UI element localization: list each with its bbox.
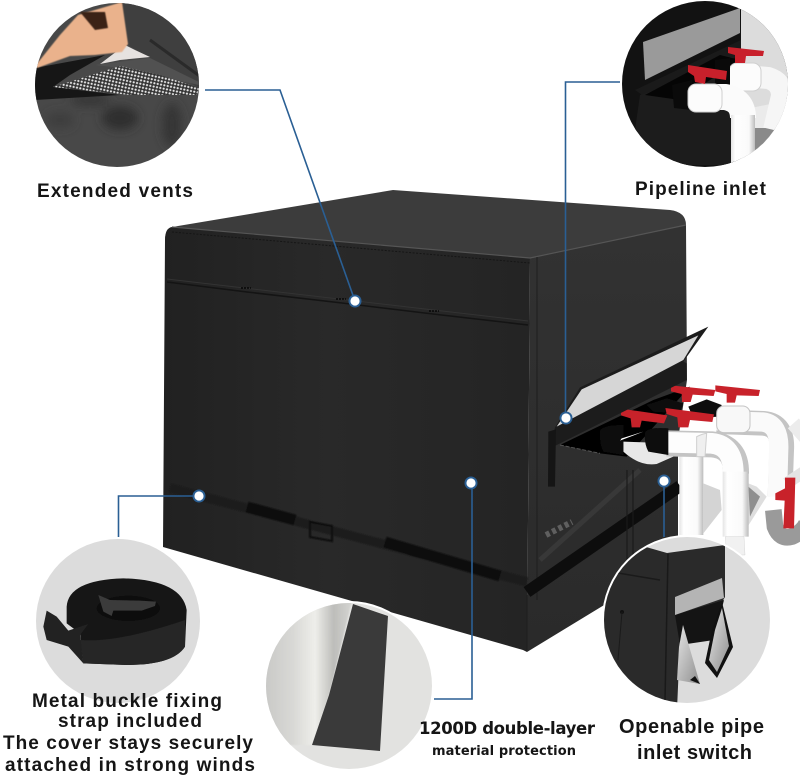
flap: pipeline inlet cover bbox=[548, 327, 708, 487]
cover top face bbox=[165, 190, 686, 258]
side strap bbox=[527, 486, 680, 592]
drain pipe bbox=[773, 510, 800, 537]
label: strap: strap included bbox=[58, 711, 202, 732]
black valve couplings bbox=[600, 425, 668, 455]
mini cover bbox=[604, 545, 725, 702]
label: 1200D: 1200D double-layer bbox=[419, 719, 596, 738]
label: openable bbox=[619, 716, 764, 764]
label: 1200D bbox=[419, 719, 596, 759]
red valve handles bbox=[621, 385, 795, 528]
rear fitting bbox=[729, 63, 761, 91]
label: strap bbox=[3, 691, 255, 776]
leader: material bbox=[434, 483, 472, 699]
marker dot: switch bbox=[658, 474, 670, 488]
vent seam bbox=[167, 282, 528, 325]
product: black cover bbox=[163, 190, 687, 652]
silver patch bbox=[675, 578, 724, 615]
label: pipeline inlet: Pipeline inlet bbox=[635, 179, 767, 200]
opening bbox=[675, 600, 724, 645]
label: openable: Openable pipe bbox=[619, 716, 764, 738]
front coupling bbox=[673, 95, 690, 110]
red handles bbox=[688, 47, 764, 84]
rear fitting bbox=[717, 406, 750, 433]
detail circle: strap bbox=[36, 539, 200, 703]
opening bbox=[645, 55, 740, 100]
left pipe bbox=[623, 442, 767, 535]
label: 1200D: material protection bbox=[432, 744, 576, 759]
detail circle: pipeline inlet bbox=[620, 0, 790, 170]
marker dot: material bbox=[464, 476, 478, 490]
detail circle: double-layer material bbox=[260, 600, 435, 775]
strap coil bbox=[67, 578, 187, 665]
label: strap: The cover stays securely bbox=[3, 733, 253, 754]
detail circle: extended vents bbox=[30, 0, 205, 170]
opening under flap bbox=[560, 387, 690, 457]
leader: switch bbox=[663, 481, 665, 537]
outer buckle bbox=[43, 611, 88, 663]
front strap bbox=[170, 488, 527, 582]
label: openable: inlet switch bbox=[637, 742, 752, 764]
pipes and valves bbox=[560, 385, 800, 555]
label: extended vents: Extended vents bbox=[37, 181, 193, 202]
rear pipe bbox=[745, 76, 782, 130]
leader: extended vents bbox=[205, 90, 355, 301]
front pipe bbox=[705, 97, 743, 118]
vent mesh bbox=[53, 66, 199, 95]
marker dot: strap bbox=[192, 490, 206, 502]
grey drain bbox=[755, 128, 775, 150]
marker dot: vents bbox=[348, 294, 362, 308]
front pipe bbox=[667, 433, 749, 555]
hanging flaps bbox=[705, 602, 733, 678]
fabric layer bbox=[312, 604, 388, 751]
rear black couplings bbox=[647, 398, 722, 418]
cover right side face bbox=[527, 225, 687, 652]
leader: pipeline inlet bbox=[566, 82, 620, 416]
detail circle: openable switch bbox=[603, 536, 770, 703]
marker dot: inlet bbox=[560, 412, 572, 424]
rear pipe bbox=[717, 421, 800, 497]
leader: strap bbox=[118, 496, 199, 537]
white tab bbox=[100, 45, 150, 64]
label: strap: Metal buckle fixing bbox=[32, 691, 222, 712]
inner buckle bbox=[98, 595, 156, 616]
hand bbox=[36, 2, 128, 68]
label: strap: attached in strong winds bbox=[5, 755, 255, 776]
cover front face bbox=[163, 227, 530, 652]
